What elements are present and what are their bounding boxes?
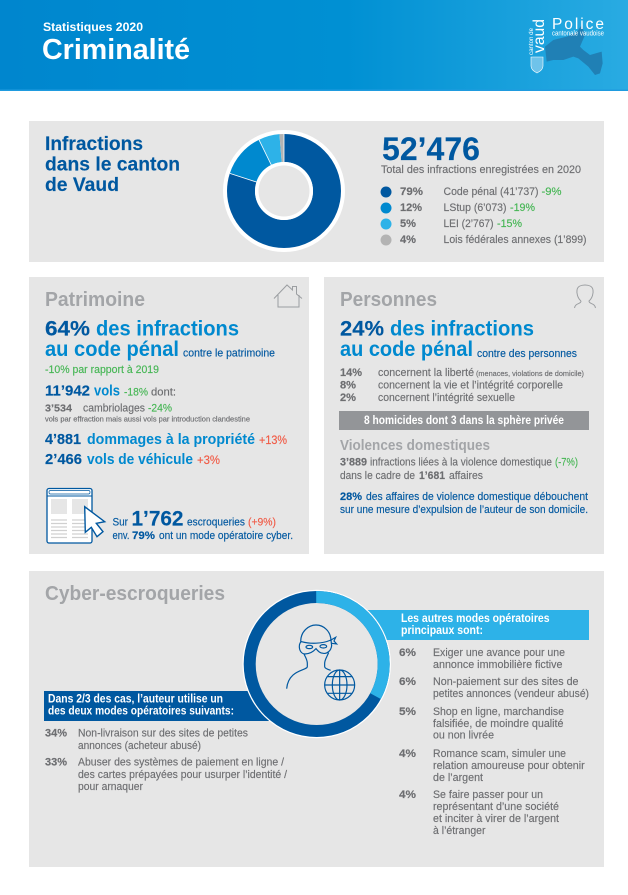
banner: homicides: [339, 411, 589, 430]
list: right modes: représentant d’une société: [433, 801, 559, 813]
key figure: 64%: au code pénal: [45, 338, 179, 361]
panel: infractions overview: [29, 121, 604, 262]
legend: Code pénal (41’737): [444, 186, 538, 198]
callout text: right: principaux sont:: [401, 625, 483, 637]
key figure: 24%: 24%: [340, 318, 384, 340]
header banner: [0, 0, 628, 91]
list: left modes: Abuser des systèmes de paiement en ligne /: [78, 756, 285, 768]
text: violence stats: [340, 456, 578, 482]
list: right modes: 6%: [399, 647, 416, 659]
stat: vehicules: +3%: [197, 453, 220, 467]
legend: [380, 186, 586, 246]
legend: 79%: [400, 186, 423, 198]
panel: patrimoine: [29, 277, 309, 554]
text: expulsion: [340, 491, 588, 516]
heading: infractions dans le canton: dans le canton: [45, 154, 180, 176]
list: right modes: 6%: [399, 676, 416, 688]
text: escroqueries: [112, 508, 293, 542]
callout text: right: [401, 613, 550, 637]
legend: 4%: [400, 234, 416, 246]
text: contre des personnes: contre des personnes: [477, 348, 577, 360]
text: expulsion: 28%: [340, 491, 362, 503]
panel: personnes: [324, 277, 604, 554]
logo: police cantonale vaudoise: cantonale vaudoise: [552, 30, 604, 38]
heading: cyber-escroqueries: Cyber-escroqueries: [45, 583, 225, 605]
text: escroqueries: 79%: [132, 530, 155, 542]
stat: vehicules: 2’466: [45, 451, 82, 468]
list: right modes: Exiger une avance pour une: [433, 647, 565, 659]
text: escroqueries: ont un mode opératoire cyber.: [159, 530, 293, 542]
stat: dommages: dommages à la propriété: [87, 431, 255, 448]
stat: vols: [45, 382, 176, 400]
legend: LStup (6’073): [444, 202, 506, 214]
icon: house: [274, 285, 302, 307]
icon: person: [574, 285, 596, 308]
banner: homicides: 8 homicides dont 3 dans la sphère privée: [364, 415, 564, 427]
stat: vehicules: vols de véhicule: [87, 451, 193, 468]
stat: vols: vols: [94, 382, 120, 400]
text: violence stats: 3’889: [340, 456, 367, 468]
panel: cyber-escroqueries: [29, 571, 604, 867]
list: right modes: petites annonces (vendeur abusé): [433, 688, 589, 700]
text: escroqueries: Sur: [112, 516, 128, 528]
callout text: left: [48, 694, 234, 718]
list: left modes: pour arnaquer: [78, 781, 143, 793]
list: concernent: (menaces, violations de domicile): [476, 369, 584, 378]
list: concernent: 14%: [340, 367, 362, 379]
list: left modes: annonces (acheteur abusé): [78, 740, 201, 752]
legend: 5%: [400, 218, 416, 230]
stat: cambriolages: vols par effraction mais aussi vols par introduction clandestine: [45, 414, 250, 424]
icon: masked hacker with globe: [287, 625, 355, 700]
heading: patrimoine: Patrimoine: [45, 289, 145, 311]
text: escroqueries: 1’762: [132, 508, 184, 530]
list: right modes: de l’argent: [433, 772, 483, 784]
total number: 52’476: [382, 131, 480, 167]
stat: vehicules: [45, 451, 220, 468]
list: right modes: Non-paiement sur des sites de: [433, 676, 578, 688]
list: concernent: 2%: [340, 392, 356, 404]
text: contre le patrimoine: contre le patrimoine: [183, 348, 275, 360]
text: violence stats: affaires: [449, 470, 483, 482]
callout text: left: Dans 2/3 des cas, l’auteur utilise un: [48, 694, 223, 706]
callout bar: right: [350, 610, 589, 640]
heading: infractions dans le canton: de Vaud: [45, 174, 119, 196]
list: left modes: Non-livraison sur des sites de petites: [78, 728, 248, 740]
list: right modes: à l’étranger: [433, 825, 486, 837]
header subtitle: Statistiques 2020: [43, 20, 143, 34]
stat: dommages: +13%: [259, 433, 287, 447]
list: right modes: ou non livrée: [433, 730, 494, 742]
text: escroqueries: escroqueries: [187, 516, 245, 528]
ring chart with icon: [243, 590, 390, 738]
legend: 12%: [400, 202, 422, 214]
key figure: 24%: au code pénal: [340, 338, 473, 361]
text: escroqueries: env.: [112, 530, 130, 542]
list: right modes: 4%: [399, 789, 416, 801]
legend: LEI (2’767): [444, 218, 494, 230]
list: concernent: concernent l’intégrité sexuelle: [378, 392, 515, 404]
list: left modes: 34%: [45, 728, 67, 740]
list: right modes: Se faire passer pour un: [433, 789, 543, 801]
list: right modes: relation amoureuse pour obtenir: [433, 760, 585, 772]
heading: personnes: Personnes: [340, 289, 437, 311]
list: right modes: falsifiée, de moindre qualité: [433, 718, 564, 730]
heading: infractions dans le canton: Infractions: [45, 133, 143, 155]
key figure: 24%: des infractions: [390, 318, 534, 340]
list: left modes: 33%: [45, 756, 67, 768]
icon: web page with cursor: [47, 488, 105, 543]
list: left modes: [45, 728, 288, 793]
total caption: Total des infractions enregistrées en 2020: [381, 164, 581, 176]
list: left modes: des cartes prépayées pour usurper l’identité /: [78, 769, 288, 781]
logo: police cantonale vaudoise: canton de: [528, 28, 535, 55]
text: escroqueries: (+9%): [248, 516, 276, 528]
header title: Criminalité: [42, 34, 190, 66]
heading: infractions dans le canton: [45, 133, 180, 196]
list: concernent: concernent la vie et l’intégrité corporelle: [378, 380, 563, 392]
key figure: 64%: [45, 318, 239, 361]
list: concernent: 8%: [340, 380, 356, 392]
donut chart: [223, 130, 345, 252]
list: right modes: 5%: [399, 706, 416, 718]
text: violence stats: (-7%): [555, 456, 578, 468]
key figure: 64%: 64%: [45, 318, 90, 340]
logo: police cantonale vaudoise: vaud: [531, 19, 548, 53]
list: right modes: Romance scam, simuler une: [433, 748, 566, 760]
key figure: 64%: des infractions: [96, 318, 239, 340]
stat: vols: -18%: [124, 386, 148, 398]
list: right modes: Shop en ligne, marchandise: [433, 706, 564, 718]
legend: -15%: [497, 218, 522, 230]
stat: cambriolages: 3’534: [45, 402, 72, 414]
heading: violences domestiques: Violences domestiques: [340, 437, 490, 454]
stat: vols: dont:: [151, 386, 176, 398]
stat: vols: 11’942: [45, 382, 90, 400]
logo: police cantonale vaudoise: Police: [552, 16, 604, 33]
text: violence stats: dans le cadre de: [340, 470, 415, 482]
text: expulsion: sur une mesure d’expulsion de l’auteur de son domicile.: [340, 504, 588, 516]
stat: cambriolages: -24%: [148, 402, 172, 414]
stat: dommages: 4’881: [45, 431, 81, 448]
key figure: 24%: [340, 318, 534, 361]
list: right modes: 4%: [399, 748, 416, 760]
text: violence stats: 1’681: [419, 470, 445, 482]
list: right modes: annonce immobilière fictive: [433, 659, 562, 671]
stat: cambriolages: [45, 402, 250, 424]
callout text: right: Les autres modes opératoires: [401, 613, 550, 625]
legend: -19%: [510, 202, 535, 214]
legend: Lois fédérales annexes (1’899): [444, 234, 586, 246]
list: right modes: [399, 647, 589, 837]
legend: -9%: [542, 186, 562, 198]
text: evolution: -10% par rapport à 2019: [45, 364, 159, 376]
list: concernent: [340, 367, 584, 404]
text: expulsion: des affaires de violence domestique débouchent: [366, 491, 588, 503]
logo: police cantonale vaudoise: [528, 16, 604, 75]
list: right modes: et inciter à virer de l’argent: [433, 813, 559, 825]
callout bar: left: [44, 691, 278, 721]
stat: cambriolages: cambriolages: [83, 402, 145, 414]
list: concernent: concernent la liberté: [378, 367, 474, 379]
callout text: left: des deux modes opératoires suivants:: [48, 706, 234, 718]
text: violence stats: infractions liées à la violence domestique: [370, 456, 552, 468]
